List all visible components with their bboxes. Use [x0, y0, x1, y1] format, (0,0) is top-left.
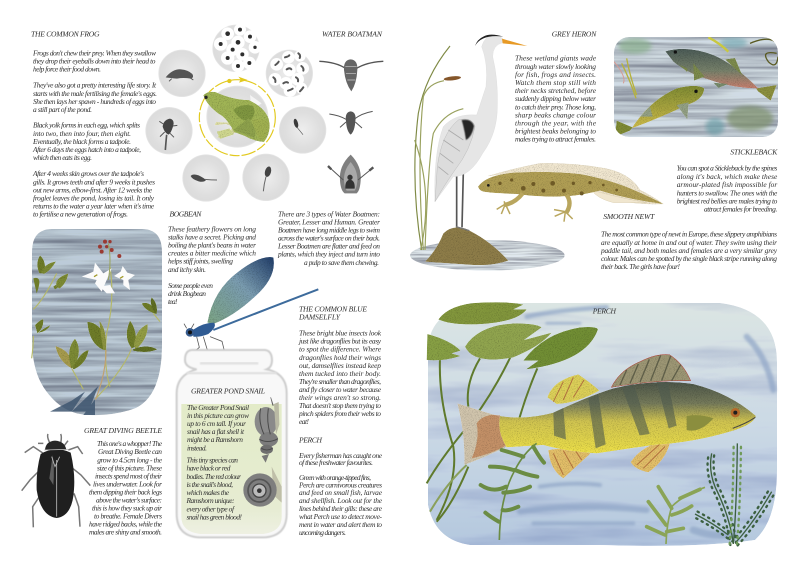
text block: heron facts: their necks stretched, before [515, 86, 597, 95]
text block: damselfly facts: to spot the difference. Where [299, 344, 382, 353]
egg disc: frogspawn [212, 24, 261, 72]
text block: water boatman facts: plants, which they inject and turn into [277, 250, 380, 259]
text block: damselfly facts: These bright blue insects look [299, 328, 382, 337]
leaves top left [33, 277, 66, 293]
text block: pond snail facts: might be a Ramshorn [187, 435, 243, 444]
text block: damselfly facts: their wings aren't so strong. [299, 393, 381, 402]
heading: the common blue damselfly: THE COMMON BLUE [299, 304, 367, 314]
text block: smooth newt facts: colour. Males can be spotted by the single black stripe running along [601, 254, 777, 263]
panel: perch illustration [427, 302, 777, 546]
bogbean shadow roots [50, 386, 98, 415]
jar with snails [177, 350, 287, 537]
text block: damselfly facts: them tucked into their body. [299, 369, 381, 378]
text block: pond snail facts: in this picture can grow [187, 411, 249, 420]
text block: perch facts: and feed on small fish, larvae [299, 488, 383, 497]
text block: water boatman facts: across the water's surface on their back. [278, 234, 380, 243]
label: perch panel caption: PERCH [592, 306, 617, 316]
text block: frog facts: starts with the male fertilising the female's eggs. [33, 89, 157, 98]
text block: bogbean facts: Some people even [168, 281, 213, 290]
text block: pond snail facts: which makes the [186, 488, 230, 497]
perch fins and tail [457, 354, 691, 478]
centre disc and adult frog [199, 77, 275, 156]
icon: adult frog [203, 92, 270, 142]
heading: water boatman: WATER BOATMAN [322, 30, 383, 38]
text block: frog facts: a still part of the pond. [33, 105, 92, 114]
text block: bogbean facts: creates a bitter medicine which [168, 248, 256, 257]
text block: water boatman facts: Lesser Boatmen are flatter and feed on [277, 242, 380, 251]
disc: tadpole bottom left [182, 154, 230, 202]
text block: perch facts: ment in water and alert them to [299, 520, 382, 529]
perch body [499, 382, 756, 453]
text block: diving beetle facts: insects spend most of their [95, 471, 162, 480]
text block: frog facts: out new arms, elbow-first. After 12 weeks the [33, 185, 153, 194]
text block: bogbean facts [168, 224, 256, 306]
text block: damselfly facts: out, damselflies instead keep [299, 361, 381, 370]
left water weed [481, 443, 544, 540]
text block: diving beetle facts: them dipping their back legs [89, 487, 162, 496]
text block: diving beetle facts: males are shiny and smooth. [89, 528, 162, 537]
text block: heron facts: for fish, frogs and insects. [515, 70, 596, 79]
panel: stickleback illustration [614, 37, 778, 137]
text block: bogbean facts: These feathery flowers on long [168, 224, 256, 233]
text block: frog facts: Frogs don't chew their prey. When they swallow [32, 48, 156, 58]
icon: lesser water boatman [329, 111, 373, 135]
text block: stickleback facts: hunters to swallow. The ones with the [677, 188, 778, 197]
icon: yellow-green stickleback [615, 86, 704, 137]
stickleback background weeds [614, 37, 778, 135]
text block: heron facts: suddenly dipping below water [515, 94, 596, 103]
text block: water boatman facts: a pulp to save them chewing. [304, 258, 379, 267]
text block: pond snail facts: snail has green blood! [186, 512, 243, 521]
text block: heron facts: brightest beaks belonging to [515, 126, 596, 135]
text block: frog facts: which then eats its egg. [33, 153, 92, 162]
text block: pond snail facts: bodies. The red colour [186, 472, 241, 481]
text block: pond snail facts: Ramshorn unique: [186, 496, 234, 505]
cycle arrow: dashed yellow ring [199, 77, 275, 156]
text block: damselfly facts: and fly closer to water because [299, 385, 382, 394]
text block: water boatman facts: Boatmen have long middle legs to swim [278, 226, 381, 235]
text block: water boatman facts: There are 3 types of Water Boatmen: [278, 210, 380, 218]
heron legs [457, 172, 463, 227]
text block: smooth newt facts [600, 230, 778, 271]
panel: bogbean illustration [32, 229, 162, 415]
water brush strokes [520, 307, 773, 535]
text block: smooth newt facts: are equally at home in and out of water. They swim using their [601, 238, 777, 247]
text block: pond snail facts: have black or red [186, 464, 231, 473]
icon: great diving beetle [22, 434, 90, 527]
text block: frog facts [32, 48, 157, 219]
text block: stickleback facts [677, 164, 778, 214]
bogbean flowers [82, 263, 135, 293]
icon: human boatman in rowing boat [328, 155, 373, 193]
frog life cycle diagram [145, 24, 326, 202]
text block: damselfly facts: pinch spiders from their webs to [298, 409, 381, 418]
text block: perch facts: uncoming dangers. [299, 528, 346, 537]
heading: smooth newt: SMOOTH NEWT [603, 212, 655, 221]
text block: heron facts: Watch them stop still with [515, 78, 596, 87]
text block: diving beetle facts: lives underwater. Look for [93, 479, 162, 488]
lily pads [427, 302, 598, 369]
bogbean red buds [98, 240, 121, 258]
disc: young frog [158, 50, 206, 97]
text block: water boatman facts: Greater, Lesser and Human. Greater [278, 218, 380, 227]
text block: frog facts: After 4 weeks skin grows over the tadpole's [32, 169, 144, 178]
text block: smooth newt facts: their back. The girls have four! [601, 262, 681, 271]
text block: pond snail facts: up to 6 cm tall. If your [187, 419, 246, 428]
text block: pond snail facts [186, 403, 249, 521]
text block: perch facts: Every fisherman has caught one [298, 451, 383, 460]
bogbean leaves [35, 297, 157, 369]
text block: heron facts [515, 54, 597, 143]
text block: frog facts: help force their food down. [33, 64, 101, 74]
icon: red-bellied stickleback [665, 49, 777, 101]
text block: damselfly facts: That doesn't stop them trying to [299, 401, 381, 410]
text block: frog facts: froglet leaves the pond, losing its tail. It only [33, 193, 155, 202]
lily stems [427, 340, 537, 522]
text block: heron facts: males trying to attract females. [515, 134, 596, 143]
heading: bogbean: BOGBEAN [170, 210, 202, 218]
text block: perch facts [298, 451, 383, 537]
heading: stickleback: STICKLEBACK [730, 148, 778, 156]
icon: greater water boatman [319, 59, 383, 91]
text block: bogbean facts: helps stiff joints, swelling [168, 256, 233, 265]
heading: great diving beetle: GREAT DIVING BEETLE [84, 426, 162, 435]
icon: damselfly [184, 257, 318, 367]
heading: grey heron: GREY HERON [552, 30, 597, 38]
right water weeds [647, 443, 774, 545]
heading: the common blue damselfly [298, 304, 367, 322]
text block: heron facts: sharp beaks change colour [515, 110, 596, 119]
icon: grey heron with reeds [410, 35, 663, 271]
text block: pond snail facts: is the snail's blood, [186, 480, 233, 489]
text block: diving beetle facts: This one's a whopper! The [97, 439, 163, 448]
text block: perch facts: what Perch use to detect move- [299, 512, 383, 521]
text block: frog facts: to fertilise a new generation of frogs. [33, 210, 128, 219]
text block: perch facts: and shellfish. Look out for the [299, 496, 383, 505]
text block: frog facts: they drop their eyeballs down into their head to [33, 56, 156, 66]
text block: heron facts: These wetland giants wade [515, 54, 597, 63]
bogbean upper leaves [37, 255, 68, 289]
heading: the common frog: THE COMMON FROG [31, 30, 100, 38]
text block: diving beetle facts: this is how they suck up air [92, 504, 162, 513]
pond ellipse [410, 240, 565, 271]
text block: perch facts: Green with orange-tipped fins, [299, 473, 371, 482]
text block: diving beetle facts [89, 439, 163, 537]
text block: diving beetle facts: Great Diving Beetle can [98, 447, 162, 456]
text block: diving beetle facts: grow to 4.5cm long - the [97, 455, 163, 464]
jar glass [177, 350, 287, 537]
cattail head [444, 75, 461, 81]
heron beak [502, 39, 527, 46]
text block: frog facts: After 6 days the eggs hatch into a tadpole, [32, 145, 141, 154]
heading: the common blue damselfly: DAMSELFLY [298, 312, 341, 322]
disc: froglet with legs [145, 107, 193, 154]
text block: damselfly facts: eat! [299, 417, 310, 426]
bogbean stems [32, 267, 160, 399]
text block: pond snail facts: The Greater Pond Snail [187, 403, 249, 412]
text block: smooth newt facts: The most common type of newt in Europe, these slippery amphibians [601, 230, 777, 239]
heading: greater pond snail: GREATER POND SNAIL [191, 387, 265, 396]
text block: diving beetle facts: to breathe. Female Divers [94, 512, 162, 521]
disc: two-stage tadpole right [279, 106, 326, 154]
text block: pond snail facts: instead. [187, 443, 207, 452]
text block: stickleback facts: attract females for breeding. [704, 205, 777, 214]
text block: perch facts: lines behind their gills: these are [299, 504, 383, 513]
text block: pond snail facts: This tiny species can [186, 456, 238, 465]
mound [425, 227, 508, 265]
text block: bogbean facts: drink Bogbean [168, 289, 206, 298]
text block: bogbean facts: boiling the plant's beans in water [168, 240, 256, 249]
text block: diving beetle facts: have ridged backs, while the [89, 520, 163, 529]
text block: frog facts: She then lays her spawn - hundreds of eggs into [33, 97, 156, 106]
icon: smooth newt [478, 163, 663, 222]
heron body and neck [435, 35, 503, 202]
text block: water boatman facts [277, 210, 381, 267]
heading: perch: PERCH [298, 436, 323, 444]
text block: stickleback facts: along it's back, which make these [677, 172, 778, 181]
reeds [415, 46, 463, 250]
text block: damselfly facts: dragonflies hold their wings [299, 353, 381, 362]
text block: perch facts: of these freshwater favourites. [299, 458, 373, 467]
text block: heron facts: through water slowly looking [515, 62, 596, 71]
text block: diving beetle facts: above the water's surface: [96, 496, 162, 505]
text block: pond snail facts: every other type of [186, 504, 235, 513]
text block: frog facts: returns to the water a year later when it's time [33, 202, 155, 211]
text block: damselfly facts [298, 328, 382, 426]
text block: frog facts: gills. It grows teeth and after 9 weeks it pushes [33, 177, 155, 186]
icon: pond snail shell [255, 397, 279, 463]
text block: stickleback facts: brightest red bellies are males trying to [677, 196, 778, 205]
text block: bogbean facts: tea! [168, 297, 178, 306]
text block: heron facts: through the year, with the [515, 118, 597, 127]
text block: bogbean facts: and itchy skin. [168, 265, 206, 274]
text block: smooth newt facts: paddle tail, and both males and females are a very similar grey [600, 246, 778, 255]
text block: stickleback facts: armour-plated fish impossible for [677, 180, 777, 189]
text block: frog facts: Eventually, the black forms a tadpole. [32, 137, 131, 146]
text block: damselfly facts: just like dragonflies but its easy [298, 336, 382, 345]
icon: ramshorn snail shell [243, 467, 282, 507]
text block: bogbean facts: stalks have a secret. Picking and [168, 232, 256, 241]
water boatman illustrations [319, 59, 383, 193]
text block: pond snail facts: snail has a flat shell it [187, 427, 245, 436]
egg disc: early tadpoles [266, 50, 313, 97]
text block: stickleback facts: You can spot a Stickleback by the spines [677, 164, 777, 173]
text block: damselfly facts: They're smaller than dragonflies, [299, 377, 381, 386]
text block: frog facts: They've also got a pretty interesting life story. It [33, 80, 157, 90]
text block: frog facts: Black yolk forms in each egg, which splits [33, 121, 140, 130]
text block: heron facts: to catch their prey. Those long, [515, 102, 596, 111]
text block: perch facts: Perch are carnivorous creatures [298, 481, 382, 490]
disc: tadpole bottom right [242, 154, 290, 201]
text block: frog facts: into two, then into four, then eight. [33, 129, 131, 138]
text block: diving beetle facts: size of this picture. These [97, 463, 163, 472]
